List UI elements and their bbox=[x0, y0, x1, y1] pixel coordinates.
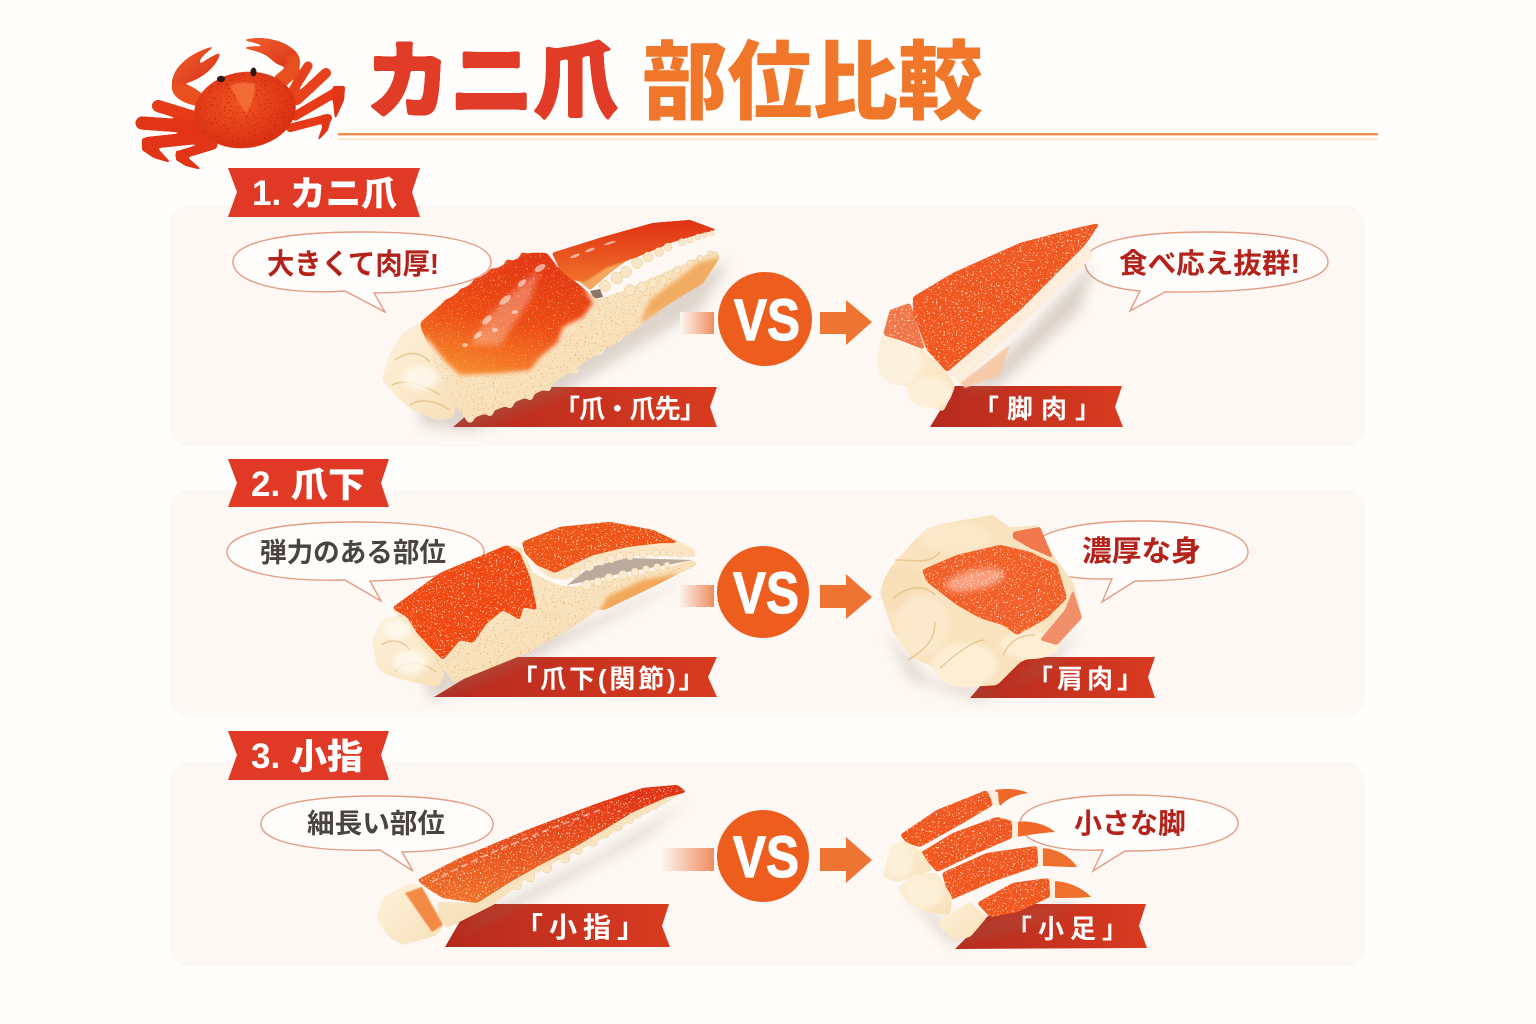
icon: crab bbox=[142, 38, 345, 170]
section heading 3: 3. bbox=[251, 737, 280, 776]
title: カニ爪 bbox=[366, 35, 618, 129]
panel: 1 カニ爪 bbox=[170, 205, 1365, 447]
VS badge bbox=[717, 546, 809, 638]
speech bubble: right: 食べ応え抜群! bbox=[1119, 248, 1300, 279]
section heading 2: 2. bbox=[251, 465, 280, 504]
label ribbon: claw: 「爪・爪先」 bbox=[554, 394, 706, 424]
photo: leg meat bbox=[876, 223, 1100, 412]
arrow out bbox=[820, 300, 872, 345]
VS badge bbox=[717, 810, 809, 902]
section heading 2 bbox=[228, 459, 389, 507]
label ribbon: shoulder meat bbox=[970, 657, 1155, 698]
photo: small legs bbox=[883, 789, 1091, 945]
section heading 2: 爪下 bbox=[291, 466, 365, 505]
label ribbon: claw bbox=[453, 387, 717, 427]
speech bubble: left bbox=[227, 522, 484, 601]
label ribbon: small leg bbox=[955, 904, 1147, 949]
VS badge: VS bbox=[733, 561, 799, 626]
panel: 3 小指 bbox=[170, 762, 1365, 967]
leg 3 bbox=[898, 845, 1077, 915]
section heading 3 bbox=[228, 731, 389, 780]
speech bubble: right bbox=[1085, 232, 1328, 311]
label ribbon: shoulder meat: 「肩肉」 bbox=[1027, 664, 1143, 694]
label ribbon: small finger bbox=[445, 904, 670, 947]
speech bubble: right: 濃厚な身 bbox=[1082, 535, 1201, 568]
VS badge: VS bbox=[733, 825, 799, 890]
section heading 3: 小指 bbox=[291, 738, 363, 777]
leg 4 bbox=[937, 878, 1091, 940]
label ribbon: leg meat bbox=[930, 386, 1123, 427]
speech bubble: left: 弾力のある部位 bbox=[260, 538, 446, 568]
label ribbon: small leg: 「小足」 bbox=[1006, 914, 1128, 944]
arrow in bbox=[680, 312, 714, 334]
speech bubble: right bbox=[1030, 521, 1248, 602]
speech bubble: right bbox=[1020, 795, 1238, 871]
leg 1 bbox=[900, 789, 1028, 847]
speech bubble: left: 細長い部位 bbox=[307, 809, 445, 839]
photo: crab claw bbox=[382, 220, 730, 432]
section heading 1: カニ爪 bbox=[290, 175, 397, 214]
panel: 2 爪下 bbox=[170, 489, 1365, 717]
speech bubble: right: 小さな脚 bbox=[1074, 808, 1186, 839]
speech bubble: left bbox=[233, 232, 491, 312]
photo: claw base bbox=[372, 522, 700, 700]
speech bubble: left bbox=[261, 796, 493, 871]
leg 2 bbox=[920, 817, 1055, 872]
label ribbon: claw base: 「爪下(関節)」 bbox=[512, 664, 704, 694]
photo: shoulder meat bbox=[880, 515, 1082, 700]
arrow out bbox=[820, 837, 872, 883]
photo: small finger bbox=[377, 785, 690, 945]
speech bubble: left: 大きくて肉厚! bbox=[267, 248, 439, 281]
label ribbon: claw base bbox=[434, 657, 717, 697]
VS badge: VS bbox=[734, 288, 800, 353]
arrow in bbox=[660, 848, 714, 871]
section heading 1: 1. bbox=[252, 174, 281, 213]
title: 部位比較 bbox=[642, 35, 983, 131]
meat of legs 1 and 2 bbox=[883, 840, 933, 882]
VS badge bbox=[718, 272, 812, 366]
title bbox=[366, 35, 983, 131]
label ribbon: small finger: 「小指」 bbox=[515, 912, 645, 943]
label ribbon: leg meat: 「脚肉」 bbox=[973, 394, 1101, 424]
section heading 1 bbox=[228, 168, 420, 217]
arrow out bbox=[820, 574, 872, 619]
arrow in bbox=[678, 585, 714, 607]
